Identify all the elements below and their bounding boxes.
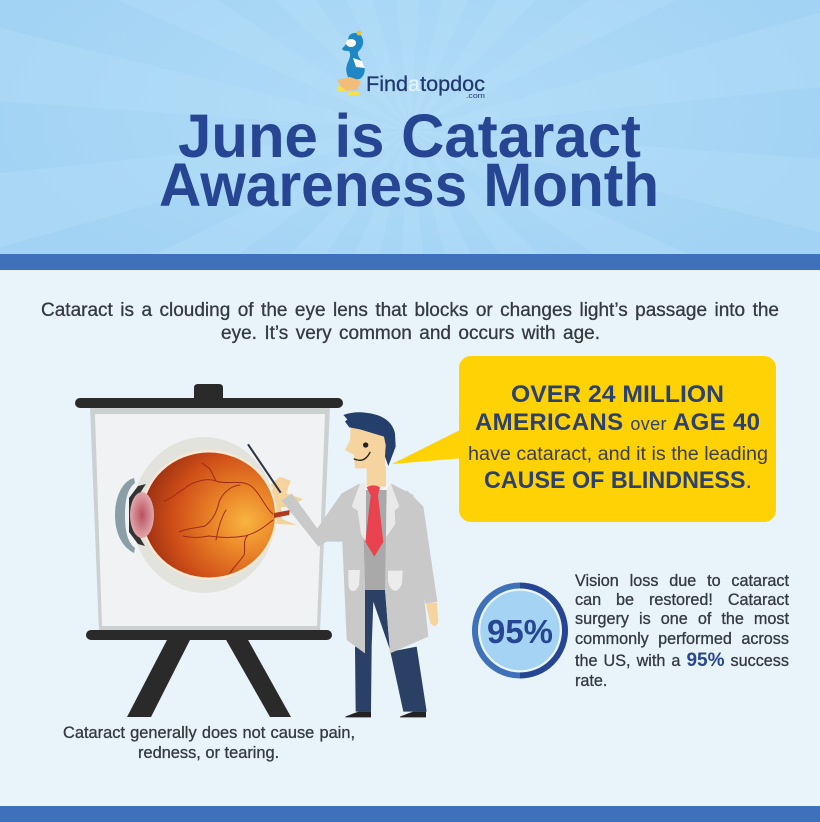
logo wordmark: Findatopdoc bbox=[366, 73, 485, 96]
surgery paragraph bbox=[574, 572, 790, 690]
callout line 1: OVER 24 MILLION bbox=[511, 381, 724, 408]
title bbox=[159, 102, 659, 219]
paragraph line 2: can be restored! Cataract bbox=[575, 591, 789, 609]
95% badge bbox=[475, 586, 565, 676]
optic nerve bbox=[266, 477, 303, 525]
paragraph line 3: surgery is one of the most bbox=[575, 610, 789, 628]
ring light half bbox=[475, 586, 520, 676]
caption bbox=[63, 724, 355, 762]
intro line 2: eye. It’s very common and occurs with age. bbox=[221, 323, 600, 344]
intro line 1: Cataract is a clouding of the eye lens that blocks or changes light’s passage into the bbox=[41, 300, 779, 321]
title line 2: Awareness Month bbox=[159, 151, 659, 219]
shirt collar bbox=[359, 482, 398, 497]
paragraph line 5: the US, with a 95% success bbox=[575, 650, 789, 671]
paragraph line 4: commonly performed across bbox=[575, 630, 789, 648]
header background with sunburst bbox=[0, 0, 820, 254]
eye bbox=[363, 442, 368, 448]
bottom blue band bbox=[0, 806, 820, 822]
callout line 4: CAUSE OF BLINDNESS. bbox=[484, 467, 752, 494]
cornea bbox=[115, 478, 135, 553]
badge fill bbox=[480, 590, 560, 670]
trousers bbox=[355, 588, 427, 712]
top blue band bbox=[0, 254, 820, 270]
bubble body bbox=[459, 356, 776, 522]
doctor illustration bbox=[248, 412, 438, 717]
caption line 2: redness, or tearing. bbox=[138, 744, 279, 762]
board surface bbox=[95, 414, 325, 626]
pointer stick bbox=[248, 444, 281, 493]
hair bbox=[343, 412, 396, 466]
callout speech bubble bbox=[392, 356, 776, 522]
easel legs bbox=[127, 638, 291, 717]
lapels bbox=[352, 483, 399, 542]
icon: duck mascot bbox=[336, 31, 365, 95]
logo .com: .com bbox=[466, 91, 485, 100]
easel knob bbox=[194, 384, 223, 404]
bubble tail bbox=[392, 428, 464, 464]
badge inner ring bbox=[480, 590, 560, 671]
paragraph line 1: Vision loss due to cataract bbox=[575, 572, 789, 590]
blood vessels bbox=[164, 463, 273, 573]
pointing hand bbox=[270, 477, 288, 500]
sclera bbox=[132, 437, 276, 593]
ear bbox=[384, 448, 391, 456]
callout line 2: AMERICANS over AGE 40 bbox=[475, 409, 760, 436]
shoes bbox=[345, 712, 426, 717]
intro text bbox=[41, 300, 779, 344]
logo bbox=[336, 31, 485, 100]
iris bbox=[129, 484, 146, 546]
presentation easel bbox=[75, 384, 343, 717]
pockets bbox=[348, 570, 403, 591]
neck bbox=[367, 467, 386, 487]
tie bbox=[365, 485, 383, 557]
vest bbox=[362, 490, 388, 590]
coat sleeve right bbox=[407, 490, 437, 603]
title line 1: June is Cataract bbox=[178, 102, 641, 170]
ring dark half bbox=[520, 586, 565, 676]
eye diagram bbox=[115, 437, 303, 593]
coat body bbox=[318, 483, 428, 653]
caption line 1: Cataract generally does not cause pain, bbox=[63, 724, 355, 742]
board frame bbox=[90, 406, 330, 632]
easel top bar bbox=[75, 398, 343, 408]
pointing arm bbox=[282, 493, 347, 547]
retina bbox=[143, 452, 275, 578]
face bbox=[345, 427, 385, 468]
smile bbox=[354, 452, 370, 460]
easel bottom bar bbox=[86, 630, 332, 640]
paragraph line 6: rate. bbox=[575, 672, 607, 690]
lens bbox=[130, 492, 154, 538]
eyeball outer rim bbox=[141, 450, 277, 580]
callout line 3: have cataract, and it is the leading bbox=[468, 444, 768, 465]
nerve root bbox=[274, 510, 290, 518]
badge number: 95% bbox=[487, 613, 553, 650]
right hand bbox=[426, 603, 438, 627]
